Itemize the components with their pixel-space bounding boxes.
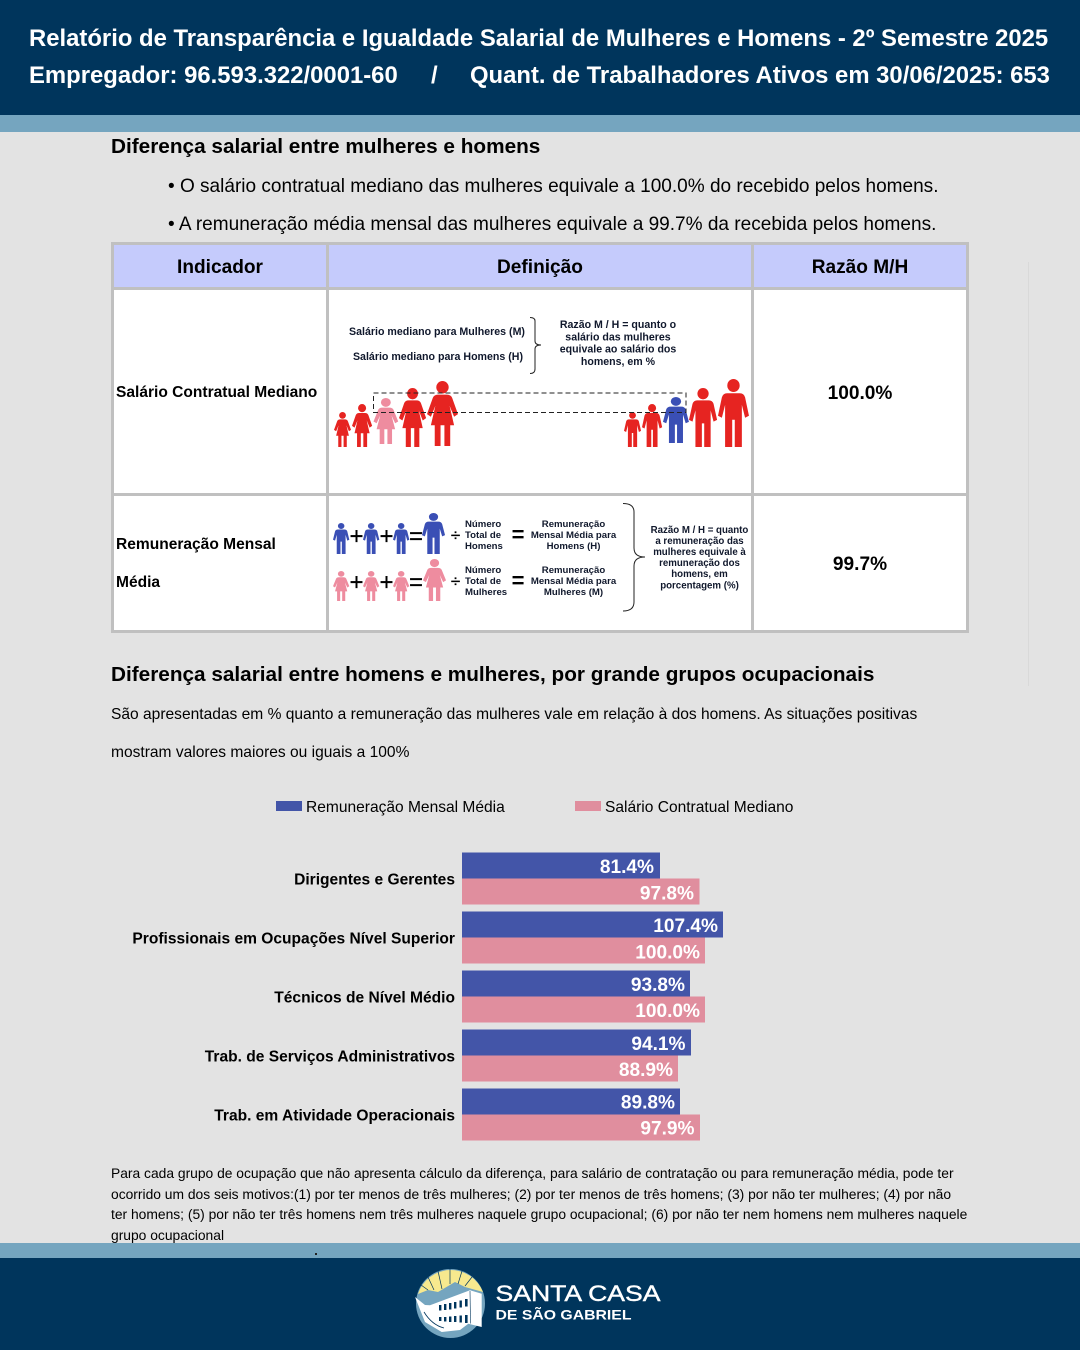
ratio explanation average — [651, 525, 748, 592]
average pay labels — [531, 519, 617, 598]
ratio explanation — [560, 319, 677, 368]
faint vertical rule — [1028, 262, 1029, 686]
row label: Remuneração Mensal Média: Remuneração Mensal — [116, 536, 276, 553]
value: 99.7%: 99.7% — [833, 554, 887, 575]
bar values: 94.1% — [631, 1034, 686, 1055]
bar chart — [132, 852, 723, 1140]
footnote — [111, 1165, 967, 1243]
women figures — [334, 381, 458, 447]
legend swatch: median salary — [575, 801, 601, 811]
count labels — [465, 519, 507, 598]
bar values: 97.9% — [640, 1118, 695, 1140]
formula operators: + — [349, 523, 364, 550]
result equals signs: = — [512, 568, 524, 593]
formula operators: ÷ — [451, 526, 460, 545]
category labels: Profissionais em Ocupações Nível Superior — [132, 930, 455, 948]
definition cell: average pay — [329, 496, 751, 630]
column header: Indicador — [114, 245, 326, 287]
diagram: median salary definition — [333, 317, 749, 612]
footnote: ter homens; (5) por não ter três homens nem três mulheres naquele grupo ocupacional; (6) por não ter nem homens nem mulheres naquele — [111, 1206, 967, 1222]
men figures — [624, 379, 749, 447]
footnote: Para cada grupo de ocupação que não apresenta cálculo da diferença, para salário de contratação ou para remuneração média, pode ter — [111, 1165, 954, 1181]
logo emblem — [415, 1269, 485, 1338]
men average formula — [333, 513, 445, 554]
footnote: grupo ocupacional — [111, 1227, 224, 1243]
ratio explanation average: a remuneração das — [655, 536, 744, 547]
brace — [530, 318, 541, 374]
bar values: 107.4% — [653, 916, 718, 937]
category labels: Técnicos de Nível Médio — [274, 990, 455, 1006]
bar values: 89.8% — [621, 1092, 675, 1114]
employer and active workers line: Quant. de Trabalhadores Ativos em 30/06/2025: 653 — [470, 62, 1050, 89]
ratio explanation average: homens, em — [671, 569, 728, 580]
column header: Razão M/H — [754, 245, 966, 287]
ratio explanation average: porcentagem (%) — [660, 580, 739, 592]
bar values: 97.8% — [640, 884, 694, 904]
category labels: Dirigentes e Gerentes — [294, 872, 455, 888]
value: 100.0% — [754, 290, 966, 493]
category labels: Trab. de Serviços Administrativos — [205, 1048, 455, 1066]
formula operators — [349, 523, 460, 596]
definition cell: median salary — [329, 290, 751, 493]
bar values: 93.8% — [631, 975, 685, 996]
median salary labels: Salário mediano para Homens (H) — [353, 351, 523, 363]
count labels: Número — [465, 565, 501, 576]
count labels: Mulheres — [465, 587, 507, 598]
bar values: 100.0% — [635, 942, 700, 964]
count labels: Total de — [465, 530, 501, 541]
legend label: average pay: Remuneração Mensal Média — [306, 799, 505, 816]
row label: Salário Contratual Mediano: Salário Contratual Mediano — [116, 384, 317, 401]
ratio explanation average: Razão M / H = quanto — [651, 525, 748, 536]
category labels: Trab. em Atividade Operacionais — [214, 1108, 455, 1124]
median dashed box — [374, 393, 686, 412]
heading: pay gap: Diferença salarial entre mulheres e homens — [111, 135, 540, 158]
count labels: Total de — [465, 576, 501, 587]
average pay labels: Mulheres (M) — [544, 587, 603, 598]
employer and active workers line: Empregador: 96.593.322/0001-60 — [29, 62, 398, 89]
ratio explanation: homens, em % — [581, 356, 656, 368]
row label: Remuneração Mensal Média — [114, 496, 326, 630]
legend swatch: average pay — [276, 801, 302, 811]
average pay labels: Homens (H) — [547, 541, 600, 552]
median salary labels: Salário mediano para Mulheres (M) — [349, 326, 525, 338]
median salary labels — [349, 326, 525, 363]
logo name: SANTA CASA — [496, 1281, 660, 1306]
median salary bars — [462, 878, 705, 1140]
bar values: 81.4% — [600, 857, 654, 878]
count labels: Número — [465, 519, 501, 530]
count labels: Homens — [465, 541, 503, 552]
footnote: ocorrido um dos seis motivos:(1) por ter menos de três mulheres; (2) por ter menos de três homens; (3) por não ter mulheres; (4) por não — [111, 1186, 951, 1202]
logo subtitle: DE SÃO GABRIEL — [496, 1306, 632, 1322]
row label: Salário Contratual Mediano — [114, 290, 326, 493]
formula operators: + — [349, 569, 364, 596]
header band — [0, 0, 1080, 115]
column header: Razão M/H: Razão M/H — [812, 257, 908, 278]
ratio explanation average: remuneração dos — [659, 558, 740, 569]
ratio explanation: salário das mulheres — [565, 332, 671, 344]
average pay labels: Mensal Média para — [531, 576, 617, 587]
report title: Relatório de Transparência e Igualdade Salarial de Mulheres e Homens - 2º Semestre 2025 — [29, 25, 1048, 52]
ratio explanation: Razão M / H = quanto o — [560, 319, 677, 331]
column header: Definição — [329, 245, 751, 287]
formula operators: ÷ — [451, 572, 460, 591]
result equals signs — [512, 522, 524, 593]
average pay bars — [462, 852, 723, 1114]
category labels — [132, 872, 455, 1124]
women average formula — [333, 559, 446, 601]
average pay labels: Mensal Média para — [531, 530, 617, 541]
intro paragraph: São apresentadas em % quanto a remuneração das mulheres vale em relação à dos homens. As situações positivas — [111, 706, 917, 723]
value: 99.7% — [754, 496, 966, 630]
column header: Definição: Definição — [497, 257, 583, 278]
formula operators: + — [379, 569, 394, 596]
employer and active workers line — [29, 62, 1050, 89]
average pay labels: Remuneração — [542, 565, 605, 576]
bar values — [600, 857, 718, 1140]
employer and active workers line: / — [431, 62, 438, 89]
result equals signs: = — [512, 522, 524, 547]
header stripe — [0, 115, 1080, 132]
bar values: 88.9% — [619, 1060, 673, 1081]
formula operators: = — [409, 523, 423, 550]
bar values: 100.0% — [635, 1001, 700, 1022]
footer band — [0, 1258, 1080, 1350]
legend — [276, 799, 793, 816]
intro paragraph: mostram valores maiores ou iguais a 100% — [111, 744, 409, 761]
panel: indicators table — [111, 242, 969, 633]
intro paragraph — [111, 706, 917, 761]
brace average — [623, 504, 645, 611]
ratio explanation average: mulheres equivale à — [653, 547, 746, 558]
column header: Indicador: Indicador — [177, 257, 263, 278]
formula operators: + — [379, 523, 394, 550]
average pay labels: Remuneração — [542, 519, 605, 530]
legend label: median salary: Salário Contratual Mediano — [605, 799, 793, 816]
ratio explanation: equivale ao salário dos — [560, 344, 676, 356]
bullet: contractual salary: • O salário contratual mediano das mulheres equivale a 100.0% do recebido pelos homens. — [168, 176, 938, 197]
heading: occupational groups: Diferença salarial entre homens e mulheres, por grande grupos ocupacionais — [111, 663, 874, 686]
value: 100.0%: 100.0% — [828, 383, 892, 404]
row label: Remuneração Mensal Média: Média — [116, 574, 160, 591]
formula operators: = — [409, 569, 423, 596]
footer stripe — [0, 1243, 1080, 1258]
bullet: average pay: • A remuneração média mensal das mulheres equivale a 99.7% da recebida pelos homens. — [168, 214, 936, 235]
